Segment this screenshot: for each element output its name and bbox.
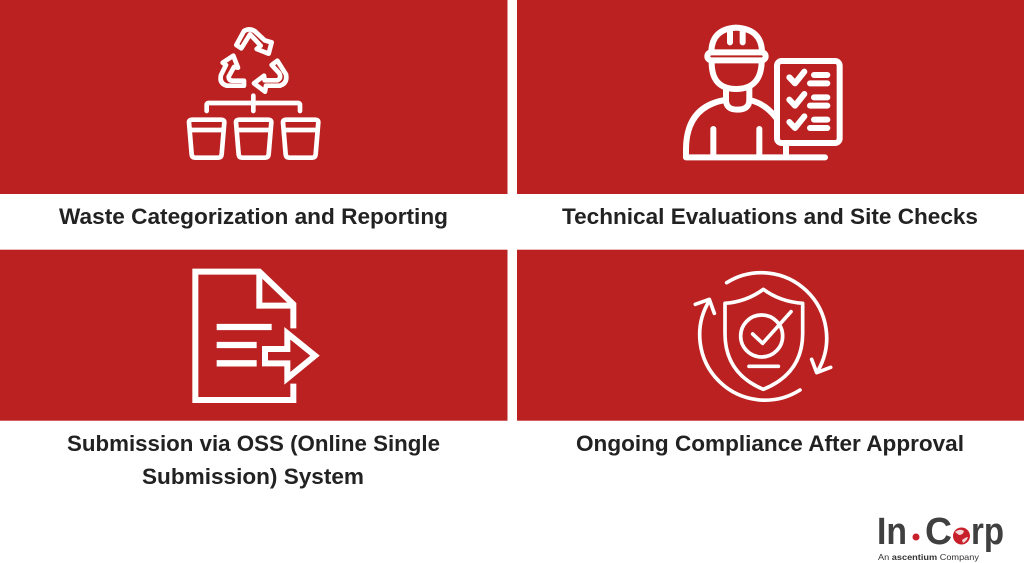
logo: InCorp <box>877 511 1004 562</box>
icon: shield with check and cycle arrows <box>695 273 831 400</box>
heading: ongoing compliance: Ongoing Compliance After Approval <box>576 431 964 456</box>
panel: waste categorization <box>0 0 508 194</box>
logo: InCorp: An ascentium Company <box>878 552 980 562</box>
heading: waste categorization: Waste Categorization and Reporting <box>59 204 448 229</box>
heading: submission via OSS <box>67 431 440 489</box>
heading: submission via OSS: Submission) System <box>142 464 364 489</box>
panel: ongoing compliance <box>517 250 1024 421</box>
heading: technical evaluations: Technical Evaluations and Site Checks <box>562 204 978 229</box>
icon: recycling symbol over three bins <box>189 29 318 158</box>
icon: document with arrow <box>195 272 315 400</box>
panel: technical evaluations <box>517 0 1024 194</box>
panel: submission via OSS <box>0 250 508 421</box>
logo: InCorp: rp <box>971 511 1004 553</box>
logo: InCorp: In <box>877 511 907 553</box>
heading: submission via OSS: Submission via OSS (Online Single <box>67 431 440 456</box>
logo: InCorp: C <box>925 511 952 553</box>
icon: engineer with checklist <box>686 28 840 157</box>
